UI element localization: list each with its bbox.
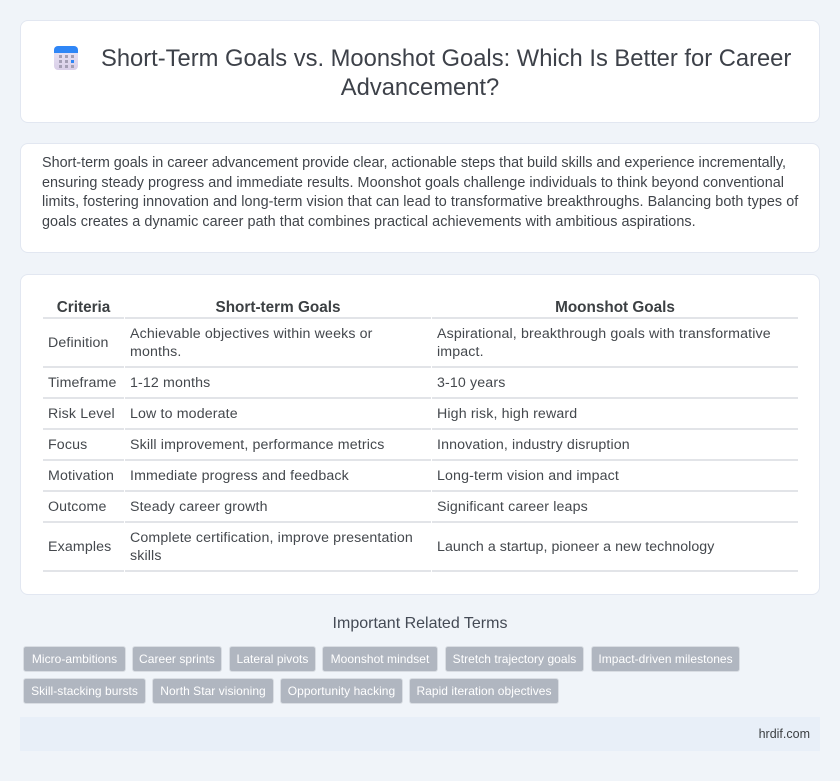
tag bbox=[445, 646, 584, 672]
panel: comparison table bbox=[20, 274, 820, 595]
row: Timeframe: Timeframe bbox=[48, 375, 117, 391]
tag bbox=[591, 646, 740, 672]
row: Outcome bbox=[48, 499, 588, 515]
intro paragraph: ensuring steady progress and immediate results. Moonshot goals challenge individuals to think beyond conventional bbox=[42, 175, 784, 191]
row: Definition: Achievable objectives within weeks or bbox=[130, 326, 373, 342]
row: Definition: impact. bbox=[437, 344, 484, 360]
row: Focus: Skill improvement, performance metrics bbox=[130, 437, 384, 453]
row: Definition: months. bbox=[130, 344, 181, 360]
tag bbox=[152, 678, 274, 704]
row: Outcome: Significant career leaps bbox=[437, 499, 588, 515]
tag: Micro-ambitions bbox=[32, 652, 117, 666]
intro paragraph: Short-term goals in career advancement provide clear, actionable steps that build skills and experience incrementally, bbox=[42, 155, 786, 171]
title: Advancement? bbox=[341, 74, 499, 101]
row: Focus: Focus bbox=[48, 437, 87, 453]
tag bbox=[229, 646, 316, 672]
row: Outcome: Outcome bbox=[48, 499, 107, 515]
row: Examples: Complete certification, improve presentation bbox=[130, 530, 413, 546]
tag bbox=[409, 678, 559, 704]
row: Timeframe bbox=[48, 375, 505, 391]
title: Short-Term Goals vs. Moonshot Goals: Which Is Better for Career bbox=[101, 45, 791, 72]
tag bbox=[23, 678, 146, 704]
row: Focus: Innovation, industry disruption bbox=[437, 437, 630, 453]
row: Focus bbox=[48, 437, 630, 453]
tag: Rapid iteration objectives bbox=[416, 684, 552, 698]
row: Motivation: Long-term vision and impact bbox=[437, 468, 619, 484]
tag: Skill-stacking bursts bbox=[31, 684, 138, 698]
tag bbox=[132, 646, 222, 672]
intro paragraph bbox=[42, 155, 798, 230]
row: Risk Level: Low to moderate bbox=[130, 406, 238, 422]
row: Timeframe: 1-12 months bbox=[130, 375, 210, 391]
tag bbox=[322, 646, 438, 672]
table header: Short-term Goals: Short-term Goals bbox=[216, 299, 340, 316]
row: Timeframe: 3-10 years bbox=[437, 375, 505, 391]
row: Risk Level bbox=[48, 406, 577, 422]
tag: Moonshot mindset bbox=[331, 652, 429, 666]
row: Examples: Examples bbox=[48, 539, 111, 555]
row: Motivation bbox=[48, 468, 619, 484]
intro paragraph: goals creates a dynamic career path that combines practical achievements with ambitious aspirations. bbox=[42, 214, 696, 230]
intro paragraph: limits, fostering innovation and long-term vision that can lead to transformative breakthroughs. Balancing both types of bbox=[42, 194, 798, 210]
tag bbox=[280, 678, 403, 704]
row: Risk Level: Risk Level bbox=[48, 406, 115, 422]
table header: Criteria: Criteria bbox=[57, 299, 110, 316]
title bbox=[101, 45, 791, 101]
row: Examples: Launch a startup, pioneer a new technology bbox=[437, 539, 714, 555]
tag: Opportunity hacking bbox=[288, 684, 395, 698]
tag: Stretch trajectory goals bbox=[453, 652, 576, 666]
row: Motivation: Motivation bbox=[48, 468, 114, 484]
row: Risk Level: High risk, high reward bbox=[437, 406, 577, 422]
panel: title header bbox=[20, 20, 820, 123]
tag: Career sprints bbox=[139, 652, 215, 666]
tag bbox=[23, 646, 126, 672]
row: Examples bbox=[48, 530, 714, 564]
tag: Lateral pivots bbox=[237, 652, 308, 666]
panel: introduction text bbox=[20, 143, 820, 253]
row: Motivation: Immediate progress and feedback bbox=[130, 468, 349, 484]
row: Examples: skills bbox=[130, 548, 162, 564]
tag: Impact-driven milestones bbox=[598, 652, 733, 666]
table header: Moonshot Goals: Moonshot Goals bbox=[555, 299, 675, 316]
row: Definition: Aspirational, breakthrough goals with transformative bbox=[437, 326, 771, 342]
tag: North Star visioning bbox=[160, 684, 266, 698]
related terms tags bbox=[23, 646, 740, 704]
row: Outcome: Steady career growth bbox=[130, 499, 268, 515]
row: Definition: Definition bbox=[48, 335, 109, 351]
row: Definition bbox=[48, 326, 771, 360]
icon: calendar bbox=[54, 46, 78, 70]
footer bar bbox=[20, 717, 820, 751]
footer source: hrdif.com bbox=[759, 727, 810, 741]
heading: related terms: Important Related Terms bbox=[333, 615, 507, 632]
